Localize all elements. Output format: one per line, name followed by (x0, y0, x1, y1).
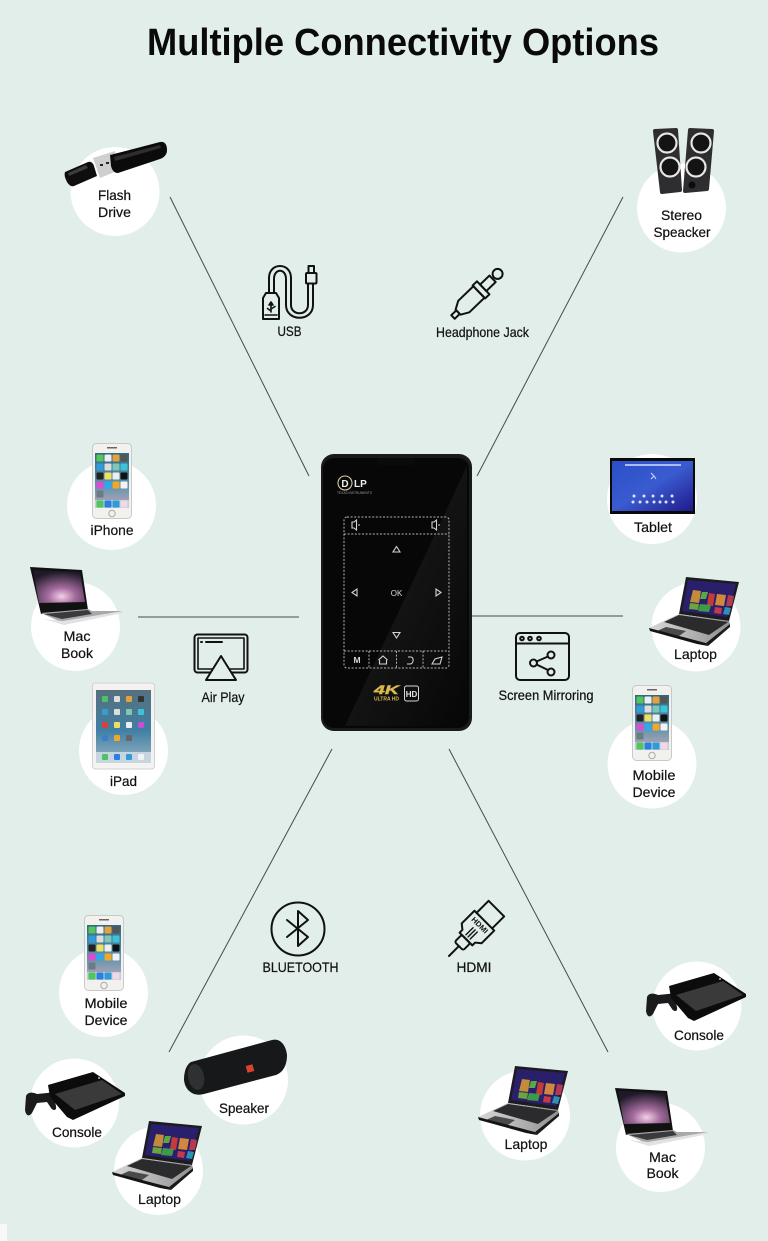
logo: dlp (337, 476, 372, 495)
label: mac book bottom: Mac (649, 1149, 676, 1165)
logo: 4k ultra hd: HD (406, 690, 417, 699)
group: laptop right (649, 577, 740, 672)
group: ipad (79, 683, 168, 795)
group: console right (646, 962, 746, 1050)
touch panel: M (353, 655, 361, 665)
logo: 4k ultra hd: 4K (372, 683, 401, 697)
icon: screen mirroring (516, 633, 569, 680)
label: usb: USB (278, 323, 302, 339)
group: iphone (67, 444, 156, 550)
label: laptop right: Laptop (674, 646, 717, 662)
label: air play: Air Play (202, 689, 244, 705)
icon: headphone jack (447, 264, 507, 323)
connector lines (138, 197, 623, 1052)
device: flash drive (65, 142, 167, 236)
group: mac book bottom: Book (646, 1165, 679, 1181)
projector body (321, 454, 472, 731)
label: bluetooth: BLUETOOTH (262, 959, 338, 975)
group: mobile device right: Device (632, 784, 676, 800)
icon: usb (263, 266, 316, 319)
logo: dlp: TEXAS INSTRUMENTS (337, 490, 372, 495)
group: console left (25, 1058, 125, 1148)
logo: 4k ultra hd: ULTRA HD (374, 696, 399, 702)
device: flash drive: Drive (98, 204, 131, 220)
logo: 4k ultra hd (372, 683, 418, 702)
projector device (321, 454, 472, 731)
group: mobile device left: Device (84, 1012, 128, 1028)
group: laptop left (112, 1121, 203, 1215)
label: laptop bottom: Laptop (504, 1136, 548, 1152)
group: speaker (184, 1036, 288, 1124)
label: headphone jack: Headphone Jack (436, 324, 530, 340)
label: tablet: Tablet (634, 519, 672, 535)
group: tablet (607, 454, 697, 544)
label: speaker: Speaker (219, 1100, 269, 1116)
device: stereo speaker (637, 130, 726, 252)
label: console right: Console (674, 1027, 724, 1043)
touch panel (344, 517, 449, 668)
group: mac book bottom (615, 1088, 708, 1192)
icon: hdmi: HDMI (470, 915, 490, 935)
label: console left: Console (52, 1124, 102, 1140)
title: Multiple Connectivity Options (147, 22, 659, 64)
label: laptop left: Laptop (138, 1191, 181, 1207)
icon: bluetooth (272, 902, 324, 956)
label: screen mirroring: Screen Mirroring (498, 687, 594, 703)
label: stereo speaker: Stereo (661, 207, 702, 223)
logo: dlp: D (341, 479, 349, 490)
label: mobile device left: Mobile (84, 995, 128, 1011)
touch panel: OK (391, 589, 403, 598)
device: stereo speaker: Speacker (654, 224, 711, 240)
label: mac book left: Mac (64, 628, 90, 644)
group: mac book left: Book (61, 645, 94, 661)
label: iphone: iPhone (90, 522, 134, 538)
group: mac book left (30, 567, 123, 671)
label: mobile device right: Mobile (632, 767, 676, 783)
label: ipad: iPad (110, 773, 137, 789)
icon: air play (194, 634, 248, 680)
label: hdmi: HDMI (456, 959, 492, 975)
group: mobile device left (59, 916, 148, 1037)
group: laptop bottom (478, 1066, 570, 1160)
icon: hdmi (439, 899, 506, 966)
logo: dlp: LP (354, 479, 367, 490)
label: flash drive: Flash (98, 187, 131, 203)
group: mobile device right (608, 686, 696, 808)
